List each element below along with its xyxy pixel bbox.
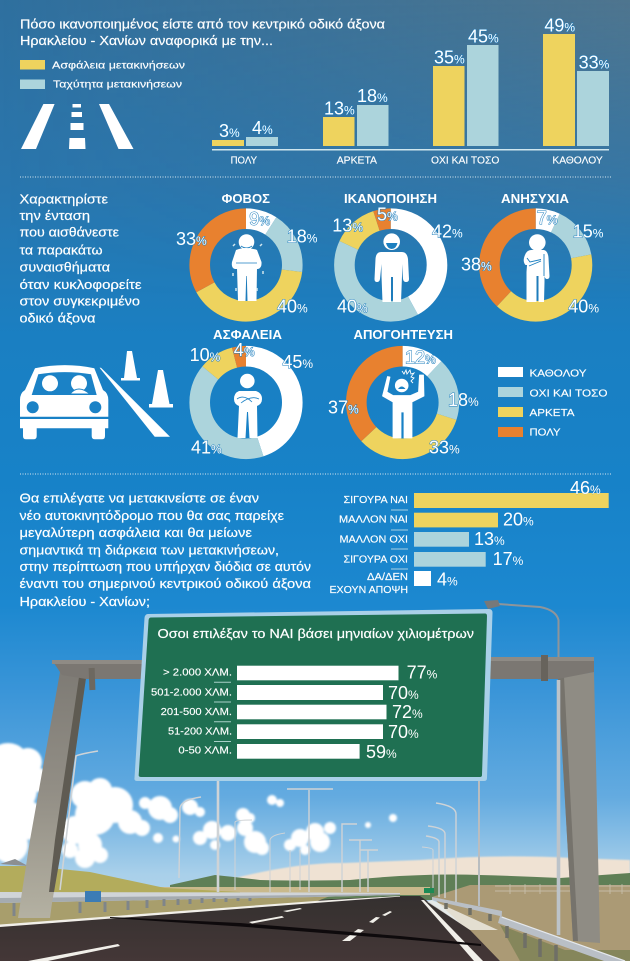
- sign bar values: 59%: [366, 742, 397, 762]
- axis labels: ΚΑΘΟΛΟΥ: [552, 155, 603, 167]
- legend: Ασφάλεια μετακινήσεων: [52, 60, 185, 72]
- horizontal bar chart: toll road preference: ΣΙΓΟΥΡΑ ΟΧΙ: [344, 554, 408, 566]
- road edge stripe: [100, 368, 170, 437]
- donut: ΑΝΗΣΥΧΙΑ: 40%: [568, 297, 599, 317]
- section 2 intro text: οδικό άξονα: [20, 310, 96, 325]
- horizontal bar chart: toll road preference: ΣΙΓΟΥΡΑ ΝΑΙ: [344, 494, 408, 506]
- donut: ΙΚΑΝΟΠΟΙΗΣΗ: ΙΚΑΝΟΠΟΙΗΣΗ: [344, 191, 437, 206]
- horizontal bar chart: toll road preference: ΔΑ/ΔΕΝ: [367, 571, 408, 583]
- donut: ΑΣΦΑΛΕΙΑ: 41%: [191, 438, 222, 458]
- title: Ηρακλείου - Χανίων αναφορικά με την...: [20, 33, 273, 48]
- donut: ΦΟΒΟΣ: 9%: [249, 209, 270, 229]
- donut legend: [498, 367, 608, 439]
- donut: ΦΟΒΟΣ: 40%: [277, 297, 308, 317]
- icon: worried person: [524, 234, 550, 302]
- hills: [170, 873, 630, 900]
- section 3 question text: έναντι του σημερινού κεντρικού οδικού άξονα: [20, 576, 312, 591]
- donut: ΑΣΦΑΛΕΙΑ: 10%: [190, 345, 221, 365]
- icon: road: [21, 104, 134, 149]
- donut: ΑΝΗΣΥΧΙΑ: ΑΝΗΣΥΧΙΑ: [501, 191, 570, 206]
- sign bar labels: 51-200 ΧΛΜ.: [168, 726, 232, 738]
- donut: ΙΚΑΝΟΠΟΙΗΣΗ: [332, 191, 463, 317]
- section 3 question text: στην περίπτωση που υπήρχαν διόδια σε αυτόν: [20, 559, 311, 574]
- section 3 question text: Θα επιλέγατε να μετακινείστε σε έναν: [20, 491, 259, 506]
- section 2 intro text: που αισθάνεστε: [20, 225, 119, 240]
- donut: ΙΚΑΝΟΠΟΙΗΣΗ: 42%: [432, 222, 463, 242]
- section 2 intro text: συναισθήματα: [20, 260, 111, 275]
- donut: ΑΣΦΑΛΕΙΑ: ΑΣΦΑΛΕΙΑ: [213, 327, 283, 342]
- lamp posts: [60, 751, 479, 906]
- donut: ΦΟΒΟΣ: ΦΟΒΟΣ: [222, 191, 270, 206]
- donut: ΑΝΗΣΥΧΙΑ: 7%: [537, 208, 558, 228]
- sign bar values: 72%: [392, 702, 423, 722]
- icon: frightened person: [232, 234, 263, 301]
- donut: ΦΟΒΟΣ: 18%: [287, 227, 318, 247]
- horizontal bar chart: toll road preference: [330, 478, 609, 596]
- axis labels: [231, 155, 603, 167]
- donut legend: ΠΟΛΥ: [530, 427, 560, 439]
- donut: ΙΚΑΝΟΠΟΙΗΣΗ: 5%: [377, 205, 398, 225]
- cones: [121, 351, 173, 408]
- small green road sign: [424, 888, 434, 893]
- donut: ΑΣΦΑΛΕΙΑ: 4%: [234, 340, 255, 360]
- fence right: [495, 884, 630, 894]
- section 2 intro text: όταν κυκλοφορείτε: [20, 277, 142, 292]
- bar values: 3%: [219, 121, 240, 141]
- donut: ΙΚΑΝΟΠΟΙΗΣΗ: 40%: [337, 297, 368, 317]
- section 3 question text: [20, 491, 312, 609]
- bar values: [219, 16, 610, 141]
- axis labels: ΠΟΛΥ: [231, 155, 257, 167]
- beige flat strip: [150, 887, 430, 895]
- sign title: Οσοι επιλέξαν το ΝΑΙ βάσει μηνιαίων χιλιομέτρων: [158, 626, 474, 641]
- gantry left support: [18, 660, 142, 918]
- icon: person with crossed arms: [234, 374, 262, 438]
- car: [20, 365, 108, 439]
- donut: ΑΝΗΣΥΧΙΑ: [461, 191, 604, 317]
- gantry shadow on road: [110, 917, 481, 946]
- axis labels: ΑΡΚΕΤΑ: [337, 155, 377, 167]
- horizontal bar chart: toll road preference: 4%: [437, 570, 458, 590]
- gantry right support: [488, 655, 600, 943]
- donut: ΙΚΑΝΟΠΟΙΗΣΗ: 13%: [332, 216, 363, 236]
- sign bar labels: 201-500 ΧΛΜ.: [161, 706, 232, 718]
- donut: ΑΠΟΓΟΗΤΕΥΣΗ: 37%: [328, 397, 359, 417]
- bar values: 33%: [579, 52, 610, 72]
- horizontal bar chart: toll road preference: ΜΑΛΛΟΝ ΟΧΙ: [340, 534, 408, 546]
- donut: ΑΝΗΣΥΧΙΑ: 38%: [461, 255, 492, 275]
- sign bars: [237, 666, 398, 759]
- horizontal bar chart: toll road preference: 13%: [474, 529, 505, 549]
- icon: car and traffic cones: [20, 351, 173, 439]
- sign bar values: [366, 663, 438, 762]
- icon: happy person: [374, 233, 409, 302]
- left distant mountains: [0, 859, 28, 866]
- horizon cloud band: [235, 856, 630, 882]
- sign bar values: 77%: [407, 663, 438, 683]
- donut: ΑΣΦΑΛΕΙΑ: [190, 327, 313, 458]
- right guard rail: [432, 897, 625, 961]
- axis labels: ΟΧΙ ΚΑΙ ΤΟΣΟ: [431, 155, 499, 167]
- bars: [212, 34, 609, 150]
- section 3 question text: Ηρακλείου - Χανίων;: [20, 594, 150, 609]
- sign bar values: 70%: [388, 683, 419, 703]
- donut legend: ΟΧΙ ΚΑΙ ΤΟΣΟ: [530, 388, 608, 400]
- donut: ΦΟΒΟΣ: 33%: [176, 229, 207, 249]
- bar values: 18%: [357, 86, 388, 106]
- section 3 question text: μεγαλύτερη ασφάλεια και θα μείωνε: [20, 525, 252, 540]
- sign bar labels: 0-50 ΧΛΜ.: [178, 745, 232, 757]
- icon: frustrated person: [382, 370, 424, 438]
- donut legend: ΑΡΚΕΤΑ: [530, 407, 574, 419]
- sign bar labels: 501-2.000 ΧΛΜ.: [151, 686, 232, 698]
- donut: ΑΠΟΓΟΗΤΕΥΣΗ: 12%: [405, 347, 436, 367]
- horizontal bar chart: toll road preference: 46%: [570, 478, 601, 498]
- bar values: 35%: [434, 47, 465, 67]
- sign bar values: 70%: [388, 722, 419, 742]
- horizontal bar chart: toll road preference: ΜΑΛΛΟΝ ΝΑΙ: [339, 514, 408, 526]
- title: Πόσο ικανοποιημένος είστε από τον κεντρικό οδικό άξονα: [20, 16, 386, 32]
- donut: ΑΠΟΓΟΗΤΕΥΣΗ: [328, 327, 479, 458]
- right field: [432, 885, 630, 961]
- horizontal bar chart: toll road preference: ΕΧΟΥΝ ΑΠΟΨΗ: [330, 584, 408, 596]
- horizontal bar chart: toll road preference: 20%: [503, 510, 534, 530]
- section 3 question text: νέο αυτοκινητόδρομο που θα σας παρείχε: [20, 508, 284, 523]
- bar values: 45%: [468, 26, 499, 46]
- bar values: 49%: [544, 16, 575, 36]
- section 3 question text: σημαντικά τη διάρκεια των μετακινήσεων,: [20, 543, 279, 558]
- section 2 intro text: στον συγκεκριμένο: [20, 294, 140, 309]
- legend: Ταχύτητα μετακινήσεων: [53, 79, 182, 91]
- donut: ΑΝΗΣΥΧΙΑ: 15%: [573, 222, 604, 242]
- highway photo: [0, 600, 630, 961]
- section 2 intro text: τα παρακάτω: [20, 242, 102, 257]
- donut: ΑΣΦΑΛΕΙΑ: 45%: [282, 352, 313, 372]
- section 2 intro text: την ένταση: [20, 208, 90, 223]
- title: [20, 16, 386, 48]
- road sign panel: [134, 609, 492, 781]
- sign bar labels: > 2.000 ΧΛΜ.: [163, 667, 232, 679]
- legend: [20, 60, 185, 91]
- sign bar labels: [151, 667, 232, 757]
- clouds: [0, 743, 397, 868]
- road: [0, 896, 500, 961]
- road lines: [0, 896, 498, 961]
- section 2 intro text: [20, 191, 142, 325]
- donut: ΑΠΟΓΟΗΤΕΥΣΗ: 18%: [448, 390, 479, 410]
- bar values: 4%: [252, 118, 273, 138]
- section 1: satisfaction bar chart: [20, 16, 610, 167]
- street lamp: [484, 600, 558, 935]
- section 2 intro text: Χαρακτηρίστε: [20, 191, 108, 206]
- donut: ΦΟΒΟΣ: [176, 191, 318, 317]
- donut legend: ΚΑΘΟΛΟΥ: [530, 368, 586, 380]
- verge under left rail: [0, 896, 330, 926]
- left grass slope: [0, 866, 240, 905]
- horizontal bar chart: toll road preference: 17%: [493, 549, 524, 569]
- donut: ΑΠΟΓΟΗΤΕΥΣΗ: ΑΠΟΓΟΗΤΕΥΣΗ: [354, 327, 453, 342]
- left guard rail: [0, 891, 400, 916]
- donut: ΑΠΟΓΟΗΤΕΥΣΗ: 33%: [429, 438, 460, 458]
- bar values: 13%: [324, 99, 355, 119]
